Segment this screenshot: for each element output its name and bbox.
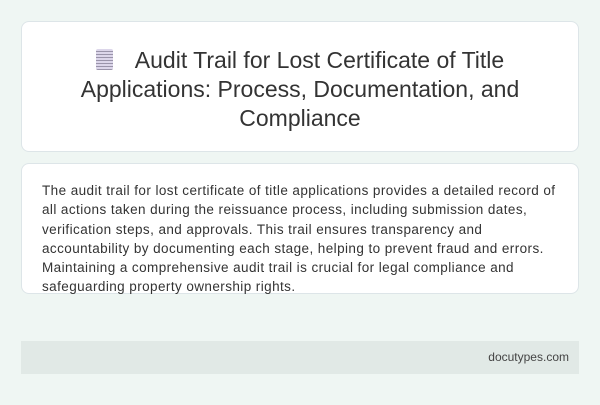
footer (21, 341, 579, 374)
icon: scroll document (96, 49, 113, 70)
panel: title (21, 21, 579, 152)
footer source text: docutypes.com (488, 350, 569, 364)
description text (42, 183, 556, 294)
description text: Maintaining a comprehensive audit trail is crucial for legal compliance and (42, 260, 514, 275)
description text: all actions taken during the reissuance process, including submission dates, (42, 202, 527, 217)
description text: verification steps, and approvals. This trail ensures transparency and (42, 222, 482, 237)
panel: description (21, 163, 579, 294)
description text: safeguarding property ownership rights. (42, 279, 296, 294)
title: Audit Trail for Lost Certificate of Title Applications: Process, Documentation, and Compliance (81, 47, 519, 131)
description text: The audit trail for lost certificate of title applications provides a detailed record of (42, 183, 555, 198)
description text: accountability by documenting each stage, helping to prevent fraud and errors. (42, 241, 544, 256)
